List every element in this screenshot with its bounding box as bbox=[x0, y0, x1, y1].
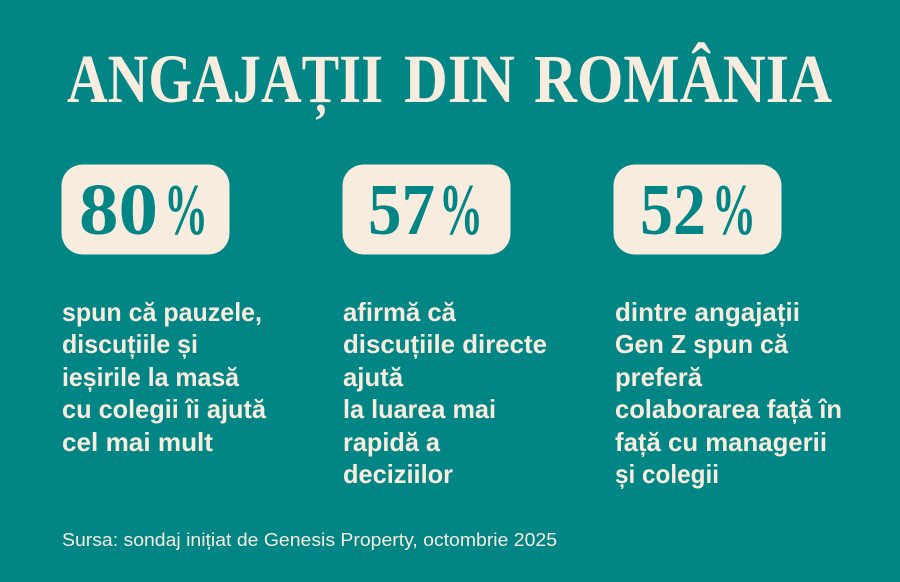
text block: 52% description: Gen Z spun că bbox=[615, 329, 789, 359]
stat badge: 80% bbox=[62, 164, 230, 254]
text block: 57% description: la luarea mai bbox=[343, 394, 496, 424]
stat badge: 80%: % bbox=[164, 169, 208, 250]
stat badge: 52% bbox=[614, 164, 782, 254]
text block: 57% description: rapidă a bbox=[343, 427, 441, 457]
text block: 52% description: față cu managerii bbox=[615, 427, 827, 457]
text block: 80% description: ieșirile la masă bbox=[62, 362, 240, 392]
stat badge: 57%: 57 bbox=[368, 169, 435, 250]
text block: 80% description: cu colegii îi ajută bbox=[62, 394, 267, 424]
text block: 80% description bbox=[62, 297, 267, 457]
text block: 80% description: discuțiile și bbox=[62, 329, 198, 359]
source note: Sursa: sondaj inițiat de Genesis Property, octombrie 2025 bbox=[62, 530, 557, 550]
text block: 57% description: deciziilor bbox=[343, 459, 453, 489]
text block: 52% description: dintre angajații bbox=[615, 297, 800, 327]
text block: 80% description: cel mai mult bbox=[62, 427, 213, 457]
title bbox=[67, 41, 832, 120]
title: ROMÂNIA bbox=[534, 41, 832, 117]
stat badge: 57% bbox=[342, 164, 510, 254]
text block: 52% description bbox=[615, 297, 842, 489]
stat badge: 80%: 80 bbox=[79, 169, 158, 250]
panel: 52% statistic bbox=[614, 164, 842, 489]
panel: 80% statistic bbox=[62, 164, 267, 457]
text block: 57% description: discuțiile directe bbox=[343, 329, 547, 359]
text block: 57% description bbox=[343, 297, 547, 489]
text block: 57% description: afirmă că bbox=[343, 297, 457, 327]
text block: 80% description: spun că pauzele, bbox=[62, 297, 262, 327]
text block: 52% description: și colegii bbox=[615, 459, 719, 489]
title: DIN bbox=[404, 41, 515, 117]
text block: 52% description: preferă bbox=[615, 362, 703, 392]
stat badge: 57%: % bbox=[439, 169, 483, 250]
panel: 57% statistic bbox=[342, 164, 547, 489]
title: ANGAJAȚII bbox=[67, 41, 383, 120]
stat badge: 52%: 52 bbox=[640, 169, 706, 250]
text block: 57% description: ajută bbox=[343, 362, 404, 392]
stat badge: 52%: % bbox=[712, 169, 756, 250]
text block: 52% description: colaborarea față în bbox=[615, 394, 842, 424]
